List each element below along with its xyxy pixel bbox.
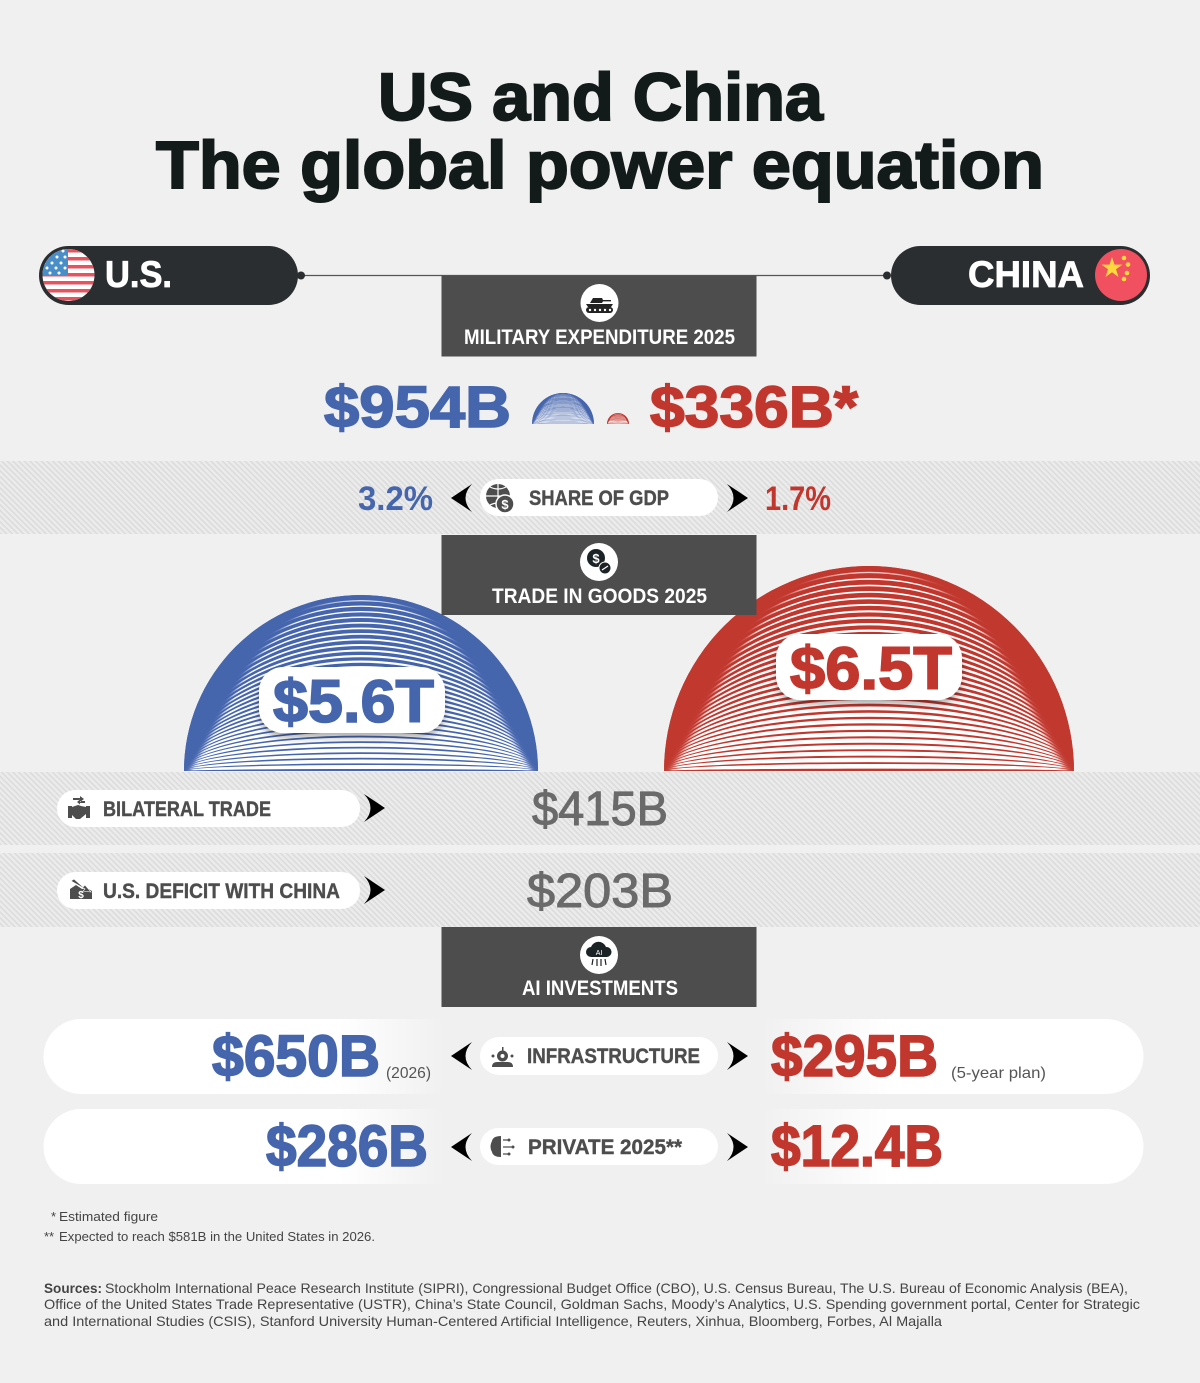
chart: China trade dome [649,550,1089,778]
row: infrastructure: INFRASTRUCTURE [527,1045,700,1068]
row: share of GDP: 1.7% [765,480,831,518]
panel heading: military expenditure [442,276,756,356]
row: share of GDP: SHARE OF GDP [529,487,669,510]
icon: China flag [1095,249,1147,301]
icon: AI cloud: AI [596,950,602,957]
icon: coins [580,543,618,581]
sources: and International Studies (CSIS), Stanford University Human-Centered Artificial Intelligence, Reuters, Xinhua, Bloomberg, Forbes, Al Majalla [44,1313,942,1329]
icon: AI cloud [580,936,618,974]
icon: falling deficit [70,879,92,901]
title: The global power equation [156,128,1044,203]
sources: Office of the United States Trade Representative (USTR), China’s State Council, Goldman Sachs, Moody’s Analytics, U.S. Spending government portal, Center for Strategic [44,1296,1140,1312]
row background: infrastructure, right [760,1019,1144,1094]
footnotes: ** [44,1229,54,1244]
country pill: China [891,246,1150,305]
row: private [266,1114,943,1179]
row: share of GDP: 3.2% [358,480,433,518]
icon: cloud infrastructure [492,1047,514,1067]
row: bilateral trade: BILATERAL TRADE [103,798,271,821]
value: China military spend: $336B* [650,375,858,440]
footnotes [44,1209,375,1244]
row: infrastructure: $650B [212,1024,380,1089]
row: infrastructure: (5-year plan) [951,1065,1046,1082]
hatched band: share of GDP [0,461,1200,534]
footnotes: Expected to reach $581B in the United States in 2026. [59,1229,375,1244]
icon: globe with dollar [486,484,514,513]
footnotes: * [51,1209,56,1224]
panel heading: trade in goods: TRADE IN GOODS 2025 [492,585,707,608]
country pill: U.S.: U.S. [105,254,172,295]
row: share of GDP [358,479,831,518]
row: infrastructure [212,1024,1046,1089]
sources: Sources: [44,1280,102,1296]
icon: globe with dollar: $ [501,497,509,512]
panel heading: military expenditure: MILITARY EXPENDITURE 2025 [464,326,735,349]
row: infrastructure: $295B [771,1024,938,1089]
footnotes: Estimated figure [59,1209,158,1224]
panel heading: AI investments [442,927,756,1007]
connector line between country pills [297,272,891,280]
icon: handshake [68,796,90,819]
value: bilateral trade: $415B [532,783,668,836]
hatched band: deficit [0,853,1200,927]
icon: tank [580,284,618,322]
country pill: China: CHINA [968,254,1084,295]
value: U.S. deficit: $203B [527,865,673,918]
sources [44,1280,1140,1329]
callout: $5.6T: $5.6T [273,668,434,735]
callout: $6.5T: $6.5T [790,635,952,702]
row: infrastructure: (2026) [386,1065,431,1082]
row: U.S. deficit: U.S. DEFICIT WITH CHINA [103,880,340,903]
row background: private, left [44,1109,445,1184]
row: U.S. deficit [57,872,385,909]
row: private: PRIVATE 2025** [528,1136,683,1159]
row: bilateral trade [57,790,385,827]
icon: falling deficit: $ [78,890,84,901]
row background: infrastructure, left [44,1019,445,1094]
row: private: $12.4B [771,1114,943,1179]
chart: small China dome [606,412,630,424]
title: US and China [378,60,824,135]
chart: small US dome [530,391,596,425]
icon: US flag [42,249,95,301]
value: US military spend: $954B [324,375,511,440]
icon: AI brain [490,1136,514,1157]
chart: US trade dome [171,581,551,777]
panel heading: trade in goods [442,535,756,615]
title [156,60,1044,203]
panel heading: AI investments: AI INVESTMENTS [522,977,678,1000]
country pill: U.S. [39,246,298,305]
hatched band: bilateral trade [0,772,1200,845]
row: private: $286B [266,1114,428,1179]
icon: coins: $ [592,551,600,566]
row background: private, right [760,1109,1144,1184]
sources: Stockholm International Peace Research Institute (SIPRI), Congressional Budget Office (CBO), U.S. Census Bureau, The U.S. Bureau of Economic Analysis (BEA), [105,1280,1128,1296]
